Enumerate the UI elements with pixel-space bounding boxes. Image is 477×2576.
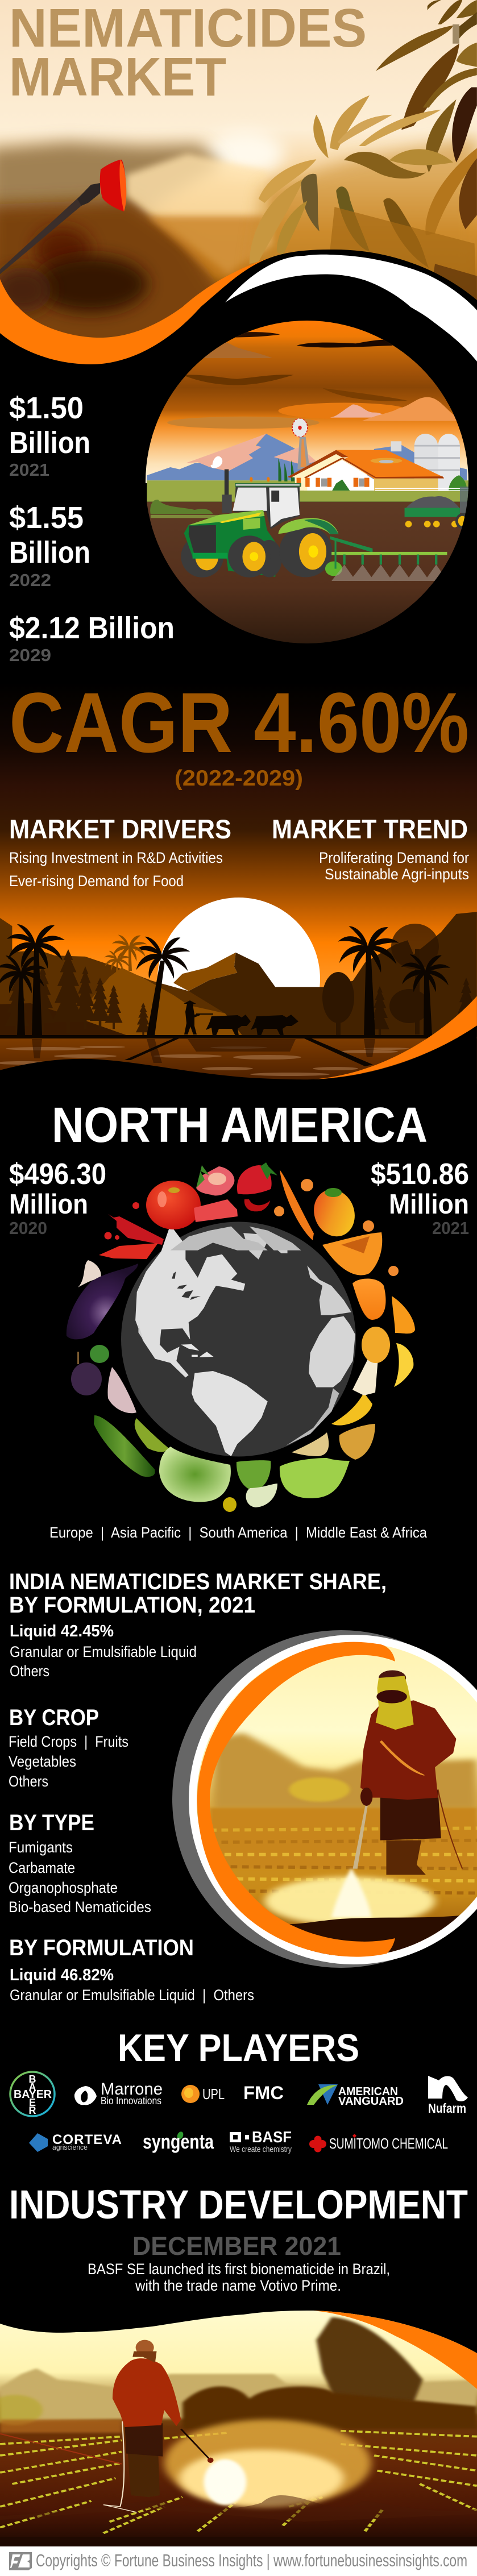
market trend bbox=[272, 814, 469, 883]
North America 2020 value: $496.30 bbox=[9, 1158, 106, 1191]
by type: Carbamate bbox=[9, 1859, 75, 1876]
logo: Sumitomo Chemical bbox=[309, 2134, 448, 2152]
by type: Bio-based Nematicides bbox=[9, 1898, 151, 1916]
heading: key players: KEY PLAYERS bbox=[118, 2026, 359, 2070]
lower wave and orange ribbon bbox=[0, 996, 477, 1095]
yellow onion bbox=[362, 1327, 390, 1363]
India market share: Liquid 42.45% bbox=[10, 1622, 114, 1640]
red pepper bbox=[108, 1214, 164, 1245]
title: MARKET bbox=[9, 47, 226, 107]
market size 2029: 2029 bbox=[9, 645, 51, 665]
logo: Corteva agriscience: CORTEVA bbox=[52, 2132, 122, 2147]
rings around sprayer photo bbox=[172, 1630, 477, 1968]
farmhouse and silos bbox=[288, 434, 469, 491]
tomato chunk bbox=[194, 1199, 238, 1222]
by type: Fumigants bbox=[9, 1839, 73, 1856]
cut strawberry bbox=[196, 1165, 234, 1195]
by formulation: BY FORMULATION bbox=[9, 1935, 194, 1960]
by crop: BY CROP bbox=[9, 1705, 99, 1730]
heading: North America: NORTH AMERICA bbox=[52, 1098, 428, 1153]
market trend: Sustainable Agri-inputs bbox=[325, 866, 469, 883]
development description: with the trade name Votivo Prime. bbox=[135, 2277, 341, 2294]
logo: Bayer: E bbox=[29, 2097, 36, 2108]
North America 2020 value: Million bbox=[9, 1189, 88, 1220]
distant palms bbox=[105, 935, 147, 973]
reflections in water bbox=[32, 1039, 375, 1063]
India market share: BY FORMULATION, 2021 bbox=[9, 1593, 255, 1618]
logo: American Vanguard: AMERICAN bbox=[338, 2085, 398, 2098]
logo: BASF bbox=[230, 2128, 292, 2154]
logo: Nufarm: Nufarm bbox=[428, 2101, 466, 2116]
title bbox=[9, 0, 367, 107]
by type: Organophosphate bbox=[9, 1879, 118, 1896]
development date: DECEMBER 2021 bbox=[132, 2232, 341, 2261]
by crop: Field Crops | Fruits bbox=[9, 1733, 128, 1750]
mango bbox=[308, 1184, 361, 1242]
market drivers: MARKET DRIVERS bbox=[9, 814, 231, 844]
crop rows bbox=[0, 2431, 477, 2533]
CAGR heading: (2022-2029) bbox=[175, 766, 303, 791]
onion wedge bbox=[107, 1367, 136, 1413]
chili bbox=[244, 1199, 270, 1211]
logo: Corteva agriscience bbox=[29, 2132, 122, 2152]
ring of fruits and vegetables bbox=[67, 1162, 415, 1512]
logo: BASF: We create chemistry bbox=[230, 2145, 292, 2154]
footer logo bbox=[9, 2552, 32, 2570]
North America 2021 value: 2021 bbox=[432, 1218, 469, 1238]
circular photo: worker spraying crops bbox=[193, 1640, 477, 1960]
market size 2021: 2021 bbox=[9, 460, 49, 480]
sprayer nozzle and wand bbox=[0, 160, 126, 275]
bottom photo: farmer spraying field bbox=[0, 2308, 477, 2546]
farmer with oxen bbox=[184, 1000, 298, 1036]
logo: Corteva agriscience: agriscience bbox=[52, 2143, 88, 2151]
pear bbox=[339, 1424, 375, 1460]
market size 2022: 2022 bbox=[9, 570, 51, 590]
windmill bbox=[292, 418, 310, 470]
trees right bbox=[322, 924, 476, 1036]
farmer figure bbox=[103, 2340, 214, 2512]
sunset landscape illustration bbox=[0, 898, 477, 1084]
circular farm illustration bbox=[142, 318, 475, 647]
by crop: Others bbox=[9, 1773, 48, 1790]
market size 2022: $1.55 bbox=[9, 501, 84, 535]
North America 2020 value: 2020 bbox=[9, 1218, 47, 1238]
market drivers bbox=[9, 814, 231, 890]
North America 2021 value bbox=[371, 1158, 469, 1238]
footer bar bbox=[0, 2546, 477, 2576]
orange crescent bbox=[197, 1642, 395, 1957]
cabbage bbox=[159, 1447, 231, 1502]
worker figure bbox=[353, 1670, 462, 1875]
globe bbox=[121, 1222, 356, 1456]
logo: Bayer: B bbox=[28, 2074, 36, 2085]
market size 2022 bbox=[9, 501, 90, 590]
by formulation: Granular or Emulsifiable Liquid | Others bbox=[10, 1987, 254, 2004]
logo: UPL bbox=[181, 2085, 225, 2103]
by crop bbox=[9, 1705, 128, 1790]
orange bbox=[352, 1278, 385, 1320]
garlic bbox=[78, 1260, 101, 1287]
palm trees bbox=[0, 924, 450, 1036]
India market share: Others bbox=[10, 1663, 49, 1680]
tomato bbox=[146, 1181, 201, 1229]
by formulation: Liquid 46.82% bbox=[10, 1966, 114, 1984]
by type bbox=[9, 1810, 151, 1916]
market size 2021: Billion bbox=[9, 426, 90, 460]
market size 2021 bbox=[9, 391, 90, 480]
by crop: Vegetables bbox=[9, 1753, 76, 1770]
small yellow fruit bbox=[223, 1497, 237, 1512]
development description: BASF SE launched its first bionematicide in Brazil, bbox=[88, 2261, 390, 2278]
pepper slice bbox=[99, 1243, 158, 1259]
market drivers: Ever-rising Demand for Food bbox=[9, 872, 184, 890]
leaf bbox=[90, 1345, 109, 1363]
logo: BASF: BASF bbox=[252, 2128, 292, 2146]
dusk gradient band bbox=[0, 682, 477, 1080]
lemon slice bbox=[394, 1343, 413, 1387]
cucumber bbox=[94, 1415, 155, 1477]
logo: Marrone Bio Innovations: Marrone bbox=[101, 2080, 163, 2099]
bottom wave and orange ribbon bbox=[0, 2307, 477, 2389]
India market share: INDIA NEMATICIDES MARKET SHARE, bbox=[9, 1569, 387, 1594]
North America 2021 value: $510.86 bbox=[371, 1158, 469, 1191]
logo: Bayer: A bbox=[28, 2081, 36, 2093]
conifer trees left bbox=[5, 949, 151, 1037]
logo: Bayer: BAYER bbox=[14, 2088, 52, 2101]
lettuce bbox=[280, 1458, 350, 1498]
orange slice bbox=[392, 1296, 415, 1333]
green apple bbox=[237, 1460, 277, 1507]
red dots bbox=[105, 1202, 139, 1240]
tractor bbox=[181, 470, 448, 581]
market size 2029 bbox=[9, 611, 175, 665]
trailer bbox=[405, 487, 475, 529]
logo: Bayer bbox=[10, 2072, 55, 2116]
logo: American Vanguard: VANGUARD bbox=[338, 2095, 404, 2108]
logo: Bayer: R bbox=[28, 2105, 36, 2116]
field texture bbox=[210, 1828, 477, 1893]
market size 2021: $1.50 bbox=[9, 391, 84, 425]
logo: FMC: FMC bbox=[243, 2083, 284, 2103]
North America 2020 value bbox=[9, 1158, 106, 1238]
hero photo: crop sprayer at sunrise bbox=[0, 0, 477, 364]
logo: Marrone Bio Innovations bbox=[74, 2080, 163, 2106]
logo: American Vanguard bbox=[307, 2084, 404, 2108]
market size 2022: Billion bbox=[9, 535, 90, 570]
carrot bbox=[280, 1170, 314, 1240]
India market share bbox=[9, 1569, 387, 1680]
other regions list: Europe | Asia Pacific | South America | Middle East & Africa bbox=[49, 1524, 427, 1541]
logo: UPL: UPL bbox=[202, 2085, 225, 2103]
logo: Marrone Bio Innovations: Bio Innovations bbox=[101, 2095, 161, 2106]
plum bbox=[71, 1352, 102, 1395]
market size 2029: $2.12 Billion bbox=[9, 611, 175, 645]
development description bbox=[88, 2261, 390, 2294]
eggplant bbox=[67, 1264, 138, 1339]
carrot slices bbox=[274, 1179, 399, 1276]
kiwi bbox=[135, 1418, 169, 1452]
pumpkin bbox=[322, 1232, 382, 1275]
logo: Syngenta: syngenta bbox=[143, 2130, 214, 2153]
by type: BY TYPE bbox=[9, 1810, 94, 1835]
market drivers: Rising Investment in R&D Activities bbox=[9, 849, 223, 866]
by formulation bbox=[9, 1935, 254, 2004]
strawberry bbox=[237, 1162, 277, 1194]
North America 2021 value: Million bbox=[389, 1189, 469, 1220]
orange swoosh and black wave bbox=[0, 250, 477, 455]
logo: Nufarm bbox=[428, 2076, 468, 2116]
pear half bbox=[292, 1432, 329, 1456]
India market share: Granular or Emulsifiable Liquid bbox=[10, 1643, 197, 1660]
banana bbox=[331, 1356, 378, 1426]
